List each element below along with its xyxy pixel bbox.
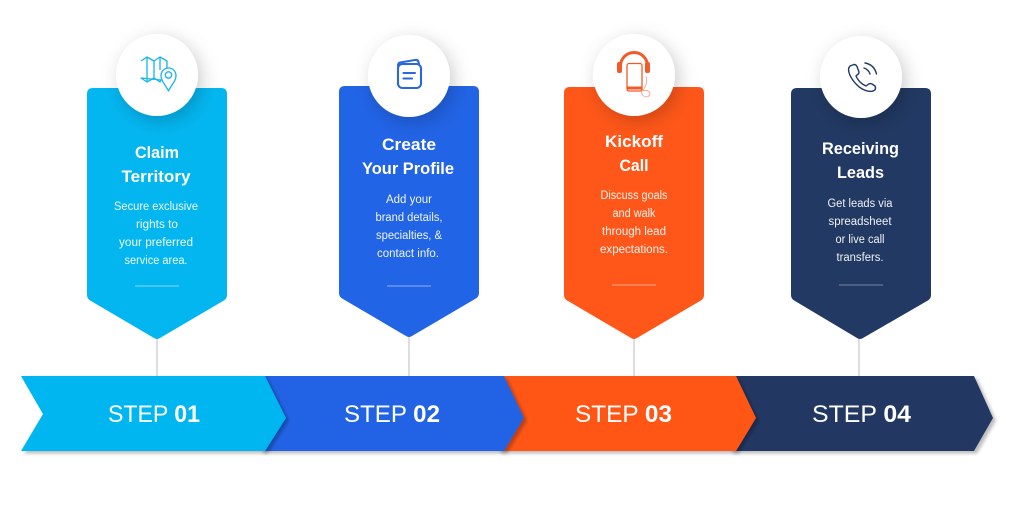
icon circle <box>368 35 450 117</box>
connector lines <box>157 337 859 377</box>
card shape <box>791 88 931 339</box>
body text: Secure exclusive <box>114 201 198 213</box>
icon: profile book <box>398 60 421 88</box>
heading: Create <box>382 135 436 154</box>
body text: contact info. <box>377 248 439 260</box>
body text <box>114 201 198 267</box>
icon circle <box>820 36 902 118</box>
heading: Claim <box>135 143 179 162</box>
body text: brand details, <box>376 212 442 224</box>
icon circle <box>593 34 675 116</box>
heading: Receiving <box>822 139 899 158</box>
body text <box>376 194 442 260</box>
icon: phone with headphones <box>617 52 650 97</box>
arrow: step 03: STEP 03 <box>575 401 672 428</box>
arrow: step 02 <box>260 376 524 451</box>
arrow: step 02: STEP 02 <box>344 401 440 428</box>
heading: Leads <box>837 163 884 182</box>
heading: Kickoff <box>605 132 663 151</box>
body text: through lead <box>602 226 666 238</box>
arrow: step 04: STEP 04 <box>812 401 912 428</box>
body text: your preferred <box>119 237 193 249</box>
card shape <box>339 86 479 337</box>
panel: kickoff call <box>564 34 704 339</box>
body text: Discuss goals <box>600 190 668 202</box>
arrow: step 03 <box>498 376 756 451</box>
heading: Call <box>620 156 648 175</box>
heading <box>605 132 663 175</box>
body text: spreadsheet <box>828 216 892 228</box>
arrow: step 04 <box>730 376 993 451</box>
body text <box>600 190 668 256</box>
body text: Add your <box>386 194 432 206</box>
panel: receiving leads <box>791 36 931 339</box>
body text: expectations. <box>600 244 668 256</box>
heading: Your Profile <box>362 159 454 178</box>
heading <box>122 143 191 186</box>
panel: create your profile <box>339 35 479 337</box>
card shape <box>87 88 227 339</box>
body text: specialties, & <box>376 230 442 242</box>
panel: claim territory <box>87 34 227 339</box>
timeline ribbon <box>21 376 993 451</box>
body text <box>828 198 893 264</box>
icon circle <box>116 34 198 116</box>
body text: or live call <box>836 234 884 246</box>
icon: phone call <box>849 63 876 91</box>
arrow: step 01: STEP 01 <box>108 401 200 428</box>
card shape <box>564 87 704 339</box>
heading <box>822 139 899 182</box>
body text: Get leads via <box>828 198 893 210</box>
arrow: step 01 <box>21 376 286 451</box>
icon: map and pin <box>141 57 176 91</box>
body text: service area. <box>124 255 188 267</box>
body text: transfers. <box>836 252 884 264</box>
heading <box>362 135 454 178</box>
heading: Territory <box>122 167 191 186</box>
body text: rights to <box>136 219 178 231</box>
body text: and walk <box>612 208 656 220</box>
